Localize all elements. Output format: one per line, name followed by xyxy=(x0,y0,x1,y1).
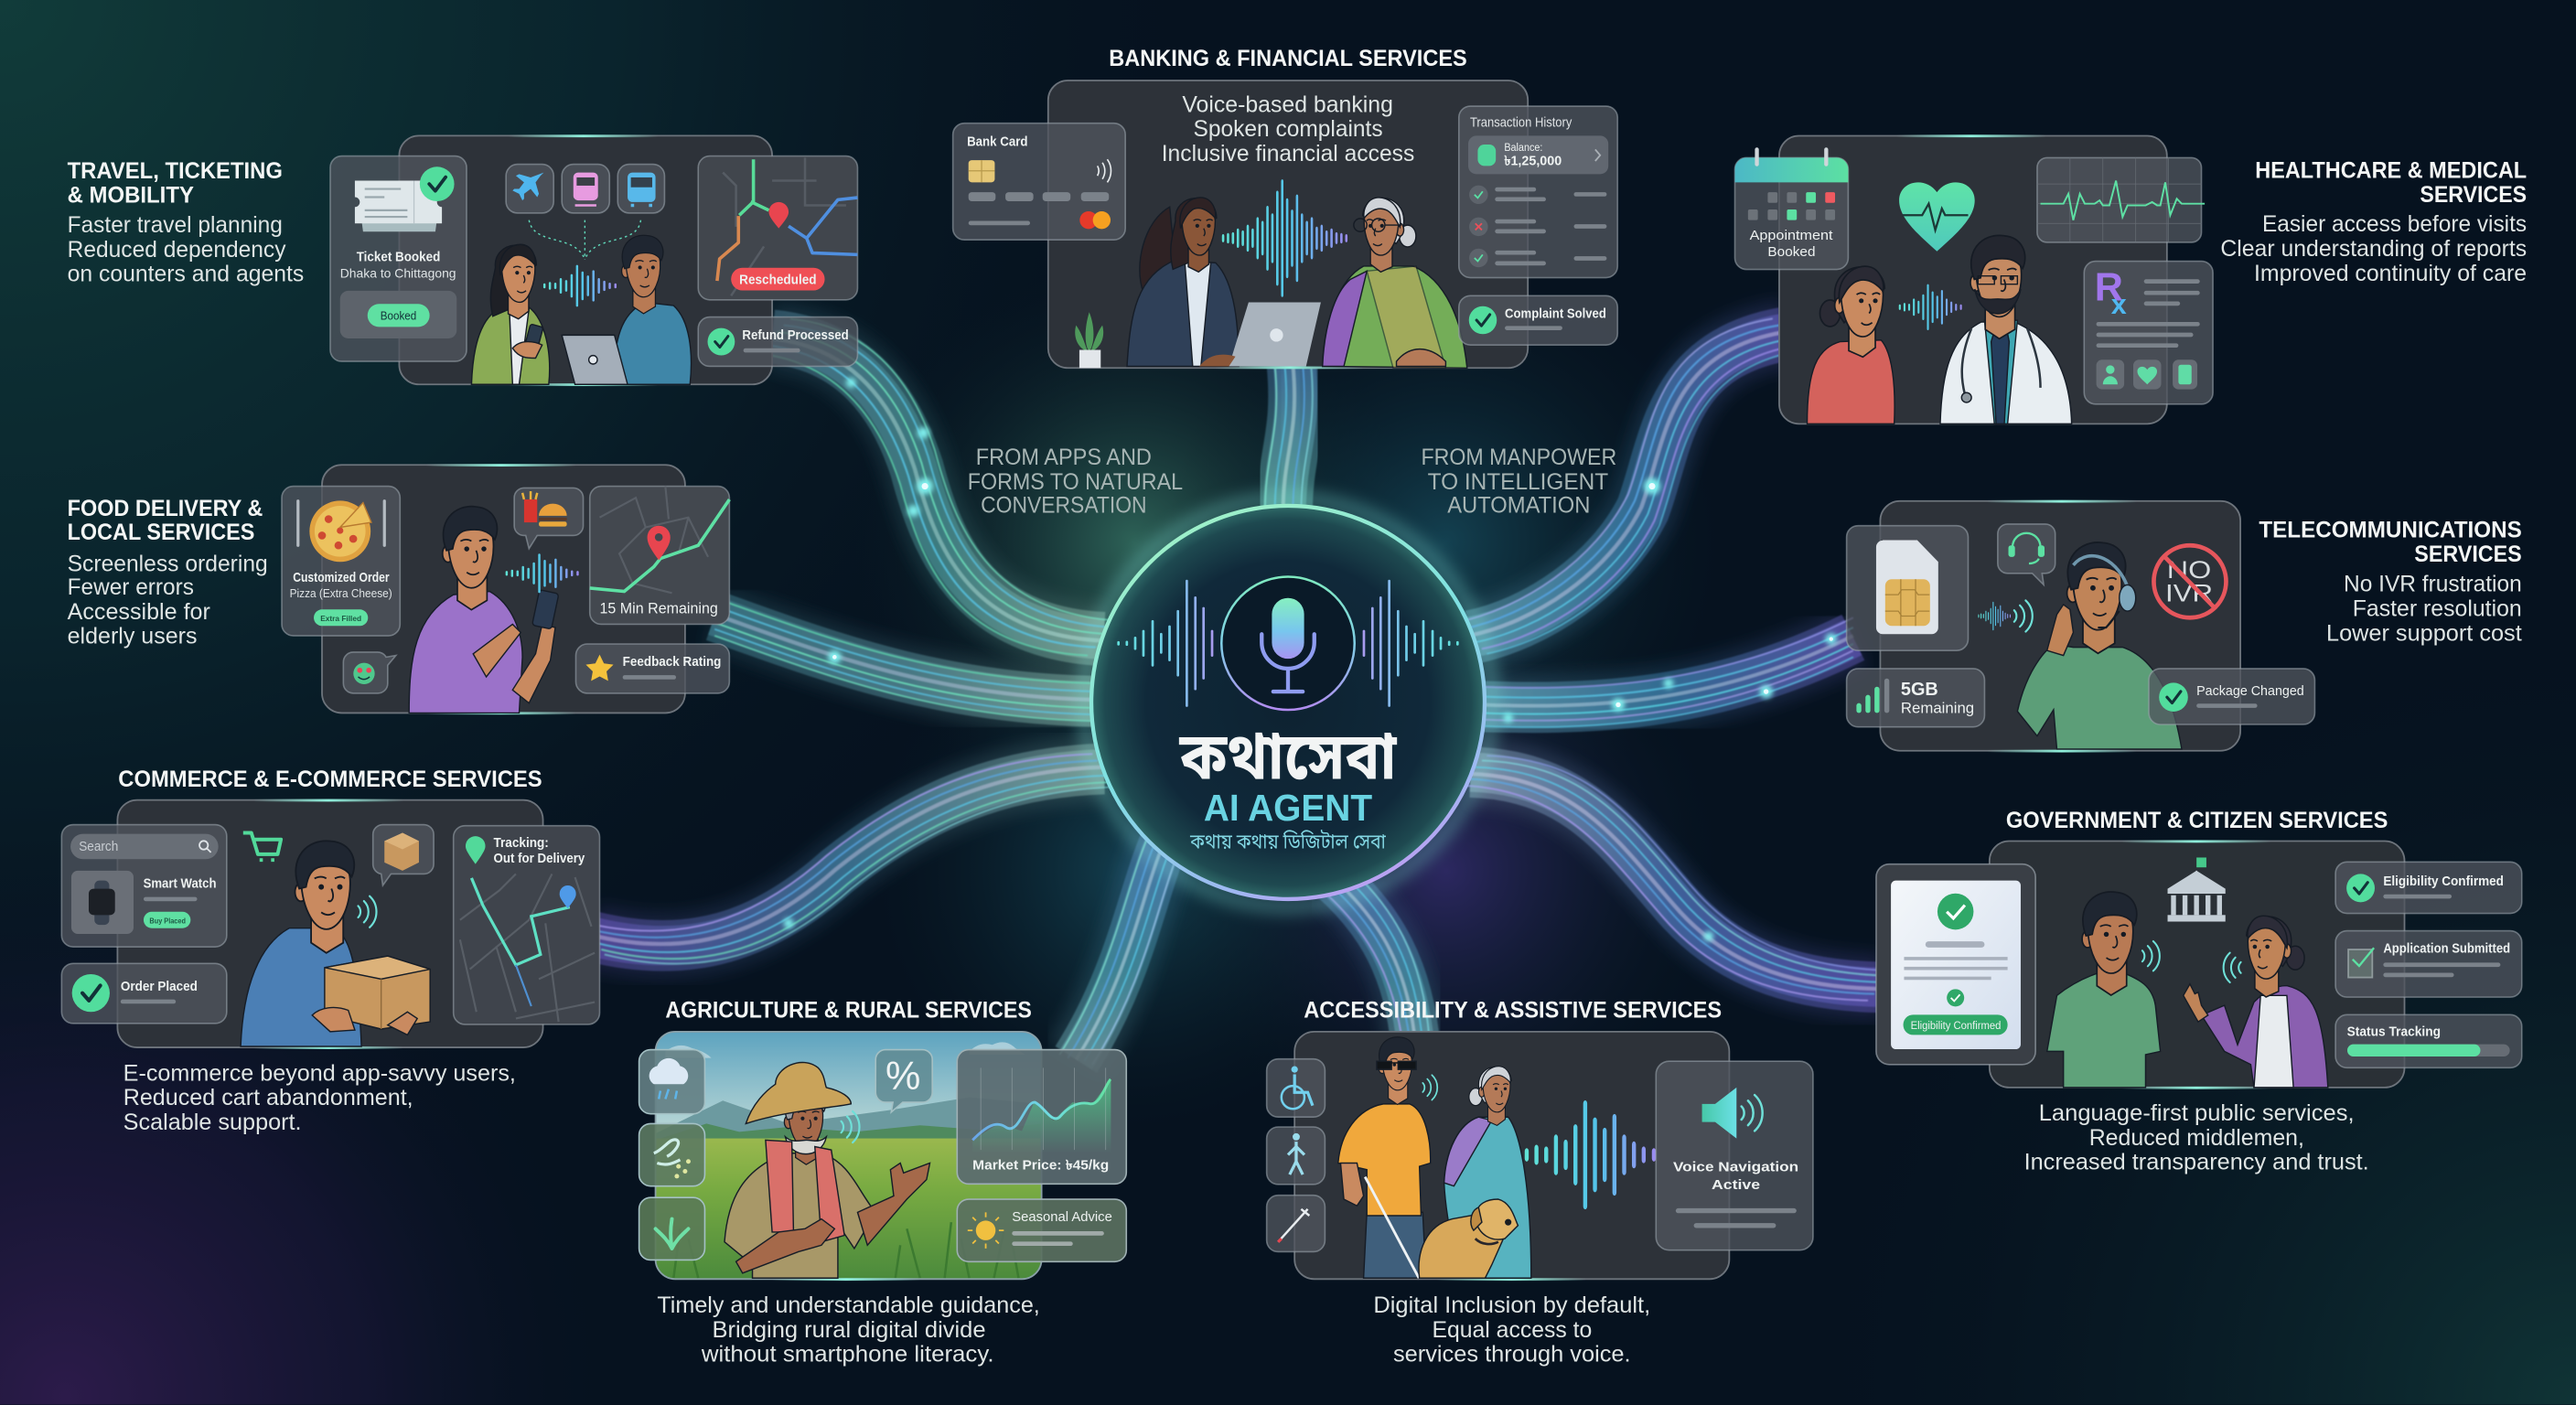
bubble: headset xyxy=(1998,524,2055,585)
card: appointment booked xyxy=(1734,149,1848,270)
text: food: elderly users xyxy=(68,623,198,649)
text: agriculture: without smartphone literacy. xyxy=(701,1341,994,1367)
card: ticket booked: Dhaka to Chittagong xyxy=(340,266,456,280)
icon: location pin xyxy=(466,836,486,864)
card: seasonal advice: Seasonal Advice xyxy=(1012,1210,1112,1225)
card: transaction history: Balance: xyxy=(1504,141,1542,154)
card: route map: Rescheduled xyxy=(739,273,817,287)
icon: no ivr: NO xyxy=(2167,556,2211,584)
text: travel: & MOBILITY xyxy=(68,182,194,208)
card: tracking map: Tracking: xyxy=(493,836,549,851)
card: appointment booked: Booked xyxy=(1767,245,1816,260)
card: sim xyxy=(1847,526,1969,650)
heading: commerce: COMMERCE & E-COMMERCE SERVICES xyxy=(118,767,542,792)
sparkles on ribbons xyxy=(784,378,1837,941)
panel: food xyxy=(282,464,729,714)
centre caption right: AUTOMATION xyxy=(1447,492,1590,518)
card: eligibility document: Eligibility Confirmed xyxy=(1911,1019,2001,1032)
card: market price xyxy=(957,1050,1126,1184)
bubble: emoji xyxy=(343,652,396,693)
centre caption right: TO INTELLIGENT xyxy=(1428,469,1608,495)
card: voice navigation: Voice Navigation xyxy=(1673,1160,1798,1174)
figure: man with laptop xyxy=(562,235,692,384)
card: complaint solved: Complaint Solved xyxy=(1505,306,1606,321)
sound bars right xyxy=(1364,581,1457,706)
wave: banking voice xyxy=(1223,181,1347,295)
card: prescription: x xyxy=(2111,289,2127,320)
text: travel: Faster travel planning xyxy=(68,212,283,238)
card: tracking map: Out for Delivery xyxy=(493,852,585,866)
wave: travel xyxy=(544,266,616,306)
panel: banking xyxy=(953,80,1617,369)
bubble: parcel xyxy=(373,825,434,885)
text: commerce: Reduced cart abandonment, xyxy=(123,1085,413,1110)
panel: agriculture xyxy=(639,1032,1126,1281)
text: telecom xyxy=(2259,517,2522,646)
icon tile: plant xyxy=(639,1197,704,1260)
card: order placed xyxy=(61,963,227,1024)
icon: pizza xyxy=(298,500,384,562)
card: prescription: R xyxy=(2095,266,2123,310)
icon tile: walking xyxy=(1267,1127,1325,1185)
card: route map xyxy=(698,156,857,300)
text: healthcare: Easier access before visits xyxy=(2262,211,2527,237)
card: eligibility document xyxy=(1876,864,2035,1065)
text: telecom: No IVR frustration xyxy=(2344,572,2522,597)
card: product search: Smart Watch xyxy=(144,877,217,892)
centre caption right xyxy=(1421,445,1616,518)
card: ticket booked xyxy=(330,156,467,361)
card: pizza order: Customized Order xyxy=(293,571,390,585)
heading: government: GOVERNMENT & CITIZEN SERVICES xyxy=(2006,808,2388,833)
card: ticket booked: Ticket Booked xyxy=(357,250,440,264)
card: voice navigation: Active xyxy=(1712,1178,1760,1193)
icon: voice arcs farmer xyxy=(842,1111,859,1142)
text: healthcare xyxy=(2220,158,2527,286)
text: travel: TRAVEL, TICKETING xyxy=(68,158,283,184)
icon: voice arcs xyxy=(359,896,376,928)
card: data remaining: Remaining xyxy=(1901,700,1974,716)
figure: elderly woman xyxy=(1444,1067,1531,1278)
card: transaction history: ৳1,25,000 xyxy=(1504,155,1562,169)
card: complaint solved xyxy=(1459,295,1617,345)
text: accessibility: Equal access to xyxy=(1433,1317,1592,1343)
ribbon: government xyxy=(1457,756,1897,1001)
dotted links xyxy=(529,220,640,260)
text: travel: on counters and agents xyxy=(68,262,304,287)
text: food: Screenless ordering xyxy=(68,551,268,576)
card: data remaining: 5GB xyxy=(1901,679,1938,700)
figure: elderly customer xyxy=(1323,198,1467,368)
icon: no ivr xyxy=(2153,545,2226,617)
text: telecom: TELECOMMUNICATIONS xyxy=(2259,517,2522,542)
card: application submitted: Application Submitted xyxy=(2383,942,2510,957)
banking text: Inclusive financial access xyxy=(1162,141,1414,166)
card: market price: Market Price: ৳45/kg xyxy=(972,1159,1109,1174)
centre caption left: FROM APPS AND xyxy=(976,445,1152,470)
figure: official woman xyxy=(2184,916,2328,1088)
wave: healthcare xyxy=(1900,285,1961,329)
icon tile: rain xyxy=(639,1050,704,1114)
centre caption left: CONVERSATION xyxy=(981,492,1147,518)
text: healthcare: HEALTHCARE & MEDICAL xyxy=(2255,158,2527,184)
text: commerce xyxy=(123,1061,516,1135)
banking text: Voice-based banking xyxy=(1182,92,1393,118)
icon tile: seeds xyxy=(639,1123,704,1186)
card: delivery map xyxy=(590,487,729,624)
wave: accessibility xyxy=(1527,1104,1654,1207)
text: agriculture: Timely and understandable guidance, xyxy=(657,1292,1040,1318)
text: telecom: Faster resolution xyxy=(2353,595,2522,621)
figure: guide dog xyxy=(1419,1199,1518,1278)
card: tracking map xyxy=(454,826,600,1024)
text: agriculture: Bridging rural digital divide xyxy=(713,1317,986,1343)
card: eligibility confirmed xyxy=(2335,862,2522,914)
sound bars left xyxy=(1119,581,1212,706)
icon: cart xyxy=(243,833,281,860)
card: ticket booked: Booked xyxy=(381,309,416,322)
ribbon: food xyxy=(714,598,1104,721)
text: healthcare: Improved continuity of care xyxy=(2254,261,2527,286)
card: delivery map: 15 Min Remaining xyxy=(600,600,718,617)
ribbon: agriculture xyxy=(1059,825,1186,1065)
card: pizza order xyxy=(282,487,400,636)
figure: man with parcel xyxy=(241,841,430,1046)
card: pizza order: Pizza (Extra Cheese) xyxy=(290,587,392,600)
icon: voice arcs xyxy=(1422,1075,1437,1100)
bubble: percent xyxy=(875,1050,932,1112)
text: accessibility xyxy=(1373,1292,1650,1367)
laptop xyxy=(1199,302,1321,366)
heading: agriculture: AGRICULTURE & RURAL SERVICES xyxy=(665,998,1032,1024)
figure: woman with phone xyxy=(471,244,550,384)
text: agriculture xyxy=(657,1292,1040,1367)
text: food xyxy=(68,496,268,649)
icon: no ivr: IVR xyxy=(2165,579,2213,606)
hub tagline: কথায় কথায় ডিজিটাল সেবা xyxy=(1189,830,1387,857)
heading: banking: BANKING & FINANCIAL SERVICES xyxy=(1109,46,1467,71)
card: bank card xyxy=(953,123,1125,240)
figure: doctor xyxy=(1940,235,2072,424)
bubble: burger xyxy=(514,488,584,549)
text: travel xyxy=(68,158,304,287)
text: travel: Reduced dependency xyxy=(68,237,286,263)
card: package changed: Package Changed xyxy=(2196,684,2304,699)
wave: food xyxy=(507,555,577,592)
icon: white cane xyxy=(1365,1177,1419,1278)
banking text xyxy=(1162,92,1414,166)
text: telecom: Lower support cost xyxy=(2326,620,2522,646)
hub title: কথাসেবা xyxy=(1179,719,1398,806)
icon: plant xyxy=(1075,312,1103,368)
card: transaction history xyxy=(1459,106,1617,278)
text: food: FOOD DELIVERY & xyxy=(68,496,263,521)
card: package changed xyxy=(2149,669,2314,724)
ribbon: travel xyxy=(756,318,1122,656)
text: food: LOCAL SERVICES xyxy=(68,520,254,545)
ribbon: accessibility xyxy=(1323,865,1429,1063)
text: accessibility: services through voice. xyxy=(1393,1341,1631,1367)
card: feedback rating: Feedback Rating xyxy=(623,655,721,670)
figure: blind man with cane xyxy=(1338,1037,1431,1278)
card: refund processed: Refund Processed xyxy=(742,328,849,343)
card: bank card: Bank Card xyxy=(967,134,1028,149)
icon: heart xyxy=(1899,182,1975,252)
panel: commerce xyxy=(61,799,600,1049)
ribbon: telecom xyxy=(1478,617,1853,727)
central hub xyxy=(1084,499,1492,906)
icon tile: wheelchair xyxy=(1267,1059,1325,1117)
hub subtitle AI AGENT: AI AGENT xyxy=(1204,787,1372,829)
card: eligibility confirmed: Eligibility Confirmed xyxy=(2383,874,2504,889)
text: government xyxy=(2024,1100,2369,1174)
icon: voice arcs woman xyxy=(2224,953,2241,982)
text: telecom: SERVICES xyxy=(2414,542,2522,567)
text: healthcare: Clear understanding of reports xyxy=(2220,236,2527,262)
card: application submitted xyxy=(2335,931,2522,997)
card: ecg monitor xyxy=(2037,157,2205,242)
centre caption left xyxy=(968,445,1183,518)
text: healthcare: SERVICES xyxy=(2420,182,2527,208)
icons: transport xyxy=(506,165,664,213)
figure: banker xyxy=(1127,198,1239,366)
card: voice navigation xyxy=(1656,1061,1813,1250)
card: data remaining xyxy=(1847,669,1984,727)
text: commerce: Scalable support. xyxy=(123,1110,302,1135)
card: feedback rating xyxy=(575,644,729,693)
card: pizza order: Extra Filled xyxy=(320,615,361,623)
icon: ticket xyxy=(355,166,455,231)
centre caption right: FROM MANPOWER xyxy=(1421,445,1616,470)
text: government: Increased transparency and trust. xyxy=(2024,1149,2369,1174)
card: status tracking: Status Tracking xyxy=(2347,1024,2441,1039)
card: status tracking xyxy=(2335,1014,2522,1067)
panel: travel xyxy=(330,134,857,386)
figure: patient xyxy=(1808,266,1894,424)
card: transaction history: Transaction History xyxy=(1470,115,1572,130)
heading: accessibility: ACCESSIBILITY & ASSISTIVE SERVICES xyxy=(1304,998,1722,1024)
card: product search: Buy Placed xyxy=(149,917,186,925)
text: accessibility: Digital Inclusion by default, xyxy=(1373,1292,1650,1318)
ribbon: commerce xyxy=(580,754,1117,964)
text: food: Fewer errors xyxy=(68,574,194,600)
card: prescription xyxy=(2084,262,2213,404)
centre caption left: FORMS TO NATURAL xyxy=(968,469,1183,495)
bubble: percent: % xyxy=(886,1055,920,1099)
card: order placed: Order Placed xyxy=(121,980,198,994)
card: appointment booked: Appointment xyxy=(1750,229,1833,243)
ribbon: banking xyxy=(1265,365,1313,512)
card: seasonal advice xyxy=(957,1199,1126,1261)
ribbon: healthcare xyxy=(1455,318,1804,654)
card: product search: Search xyxy=(79,840,118,854)
figure: support agent xyxy=(2017,542,2182,749)
figure: citizen man xyxy=(2047,892,2161,1088)
card: product search xyxy=(61,825,227,947)
panel: accessibility xyxy=(1267,1032,1813,1281)
text: food: Accessible for xyxy=(68,599,210,625)
icon tile: cane xyxy=(1267,1196,1325,1251)
icon: government building xyxy=(2168,857,2226,922)
figure: farmer xyxy=(724,1062,929,1278)
icon: microphone ring xyxy=(1221,577,1355,710)
text: government: Reduced middlemen, xyxy=(2089,1125,2304,1151)
banking text: Spoken complaints xyxy=(1194,116,1383,142)
figure: man ordering xyxy=(409,507,559,713)
wave: telecom xyxy=(1979,600,2033,632)
panel: healthcare xyxy=(1734,134,2213,424)
panel: government xyxy=(1876,840,2522,1089)
card: refund processed xyxy=(698,317,857,366)
text: government: Language-first public services, xyxy=(2039,1100,2355,1126)
icon: voice arcs man xyxy=(2142,941,2160,971)
panel: telecom xyxy=(1847,500,2314,753)
text: commerce: E-commerce beyond app-savvy users, xyxy=(123,1061,516,1087)
